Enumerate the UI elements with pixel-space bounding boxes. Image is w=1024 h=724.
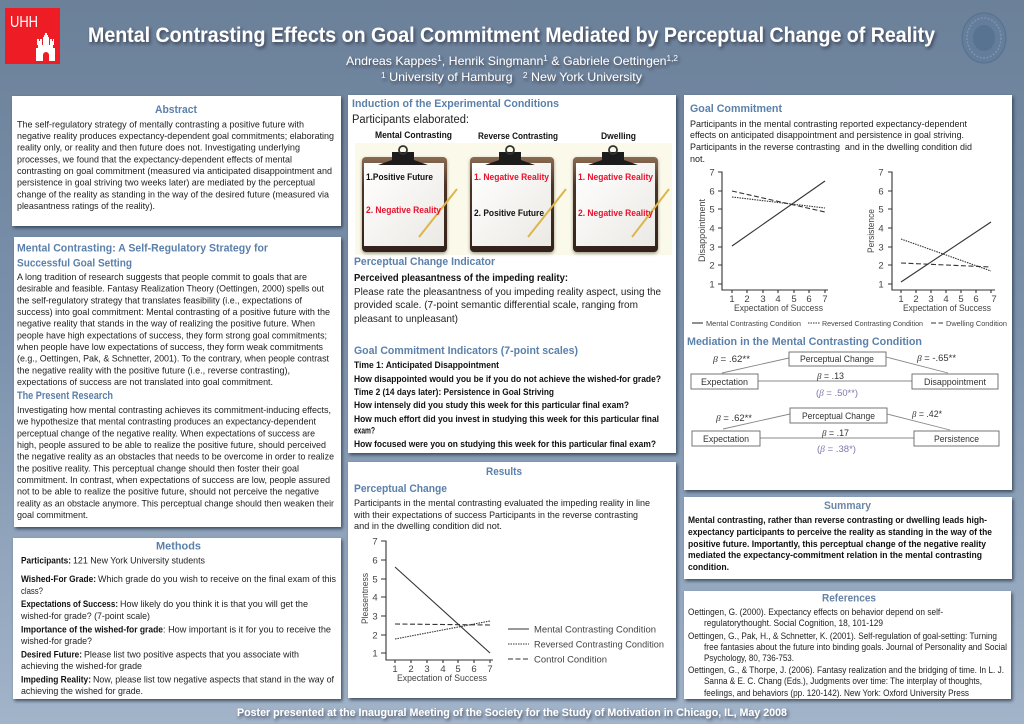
line chart: disappointment: 3 xyxy=(760,294,766,305)
text: results body xyxy=(353,498,650,531)
panel: induction and indicators xyxy=(348,95,676,453)
text: expectations of success: How likely do you think it is that you will get the xyxy=(120,599,308,609)
heading: mental contrasting xyxy=(17,242,269,270)
line chart: disappointment: Expectation of Success xyxy=(734,303,823,314)
line chart: pleasantness: 6 xyxy=(372,556,378,566)
chart legend: pleasantness: Reversed Contrasting Condition xyxy=(534,640,664,650)
line chart: disappointment: 1 xyxy=(729,294,735,305)
text: wished-for grade: Wished-For Grade: xyxy=(21,574,96,584)
clipboard: reverse contrasting: 1. Negative Reality xyxy=(474,172,549,182)
line chart: disappointment: Disappointment xyxy=(697,199,708,262)
line chart: disappointment: 7 xyxy=(709,168,715,178)
text: present research body: goal commitment. xyxy=(17,510,88,520)
text: results body: with their expectations of success Participants in the reverse contrasting xyxy=(353,510,638,520)
text: results body: and in the dwelling condition did not. xyxy=(354,521,502,531)
panel: abstract xyxy=(12,96,341,226)
diagram: persistence mediation: β = .42* xyxy=(911,409,943,419)
panel: summary xyxy=(684,497,1012,579)
text: perceptual change indicator: Perceived pleasantness of the impeding reality: xyxy=(354,273,568,284)
text: mental contrasting body: people have high expectations of success, they form strong goal commitments; xyxy=(17,330,327,340)
heading: summary: Summary xyxy=(824,500,872,512)
text: expectations of success: wished-for grade? (7-point scale) xyxy=(20,611,150,621)
line chart: pleasantness: 4 xyxy=(372,592,378,604)
text: perceptual change indicator xyxy=(354,273,661,325)
text: expectations of success xyxy=(20,599,308,621)
text: mental contrasting body: the negative reality with the positive future (i.e., reverse contrasting), xyxy=(17,365,290,375)
authors: , Henrik Singmann xyxy=(442,54,543,68)
diagram: persistence mediation: Expectation xyxy=(703,434,749,444)
text: goal commitment indicators: How focused were you on studying this week for this particular final exam? xyxy=(354,439,656,449)
text: mental contrasting body: desirable and feasible. Fantasy Realization Theory (Oettingen, 2000) spells out xyxy=(17,284,324,294)
text: importance of the wished-for grade xyxy=(20,625,331,646)
heading: goal commitment: Goal Commitment xyxy=(690,103,782,115)
text: mental contrasting body: the self-regulatory strategy that translates feasibility (i.e., expectations of xyxy=(17,295,302,305)
chart legend: pleasantness: Control Condition xyxy=(534,654,607,666)
line chart: persistence: 3 xyxy=(878,242,884,254)
line chart: disappointment: 3 xyxy=(709,242,715,254)
text: impeding reality xyxy=(21,675,334,696)
authors: New York University xyxy=(528,70,642,84)
text: present research body: not to be able to realize the positive future, should not perceive the negative xyxy=(17,487,319,497)
clipboard: mental contrasting: 1.Positive Future xyxy=(366,172,433,182)
clipboard: dwelling: 2. Negative Reality xyxy=(578,208,653,218)
authors: 1 xyxy=(543,54,548,63)
text: importance of the wished-for grade: : How important is it for you to receive the xyxy=(163,625,331,635)
text: abstract body xyxy=(17,119,334,211)
text: importance of the wished-for grade: wished-for grade? xyxy=(20,636,92,646)
authors: 1 xyxy=(437,54,442,63)
line chart: pleasantness: 5 xyxy=(372,574,378,586)
diagram: persistence mediation: β = .17 xyxy=(821,428,849,438)
text: goal commitment body: effects on anticipated disappointment and persistence in goal striving. xyxy=(690,130,964,140)
authors: & Gabriele Oettingen xyxy=(548,54,667,68)
diagram: disappointment mediation: Expectation xyxy=(701,377,748,387)
text: summary body: positive future. Importantly, this perceptual change of the negative reality xyxy=(688,539,987,549)
text: goal commitment indicators: How intensely did you study this week for this particular final exam? xyxy=(354,400,629,410)
line chart: disappointment: 6 xyxy=(709,186,715,198)
text: participants: Participants: xyxy=(21,556,71,566)
line chart: pleasantness: 5 xyxy=(455,664,461,675)
text: impeding reality: Impeding Reality: xyxy=(21,675,91,685)
text: abstract body: change of the reality as standing in the way of the desired future (measured via xyxy=(17,189,330,199)
title: Mental Contrasting Effects on Goal Commitment Mediated by Perceptual Change of Reality xyxy=(88,24,935,47)
panel: methods xyxy=(13,538,341,699)
text: reference list: regulatorythought. Social Cognition, 18, 101-129 xyxy=(704,618,883,628)
text: wished-for grade: class? xyxy=(21,586,43,596)
line chart: persistence: 4 xyxy=(878,224,884,234)
authors xyxy=(346,54,679,84)
line chart: pleasantness: Pleasentness xyxy=(360,573,371,624)
text: goal commitment body: Participants in the reverse contrasting and in the dwelling condition did xyxy=(690,142,972,152)
diagram: disappointment mediation: β = .62** xyxy=(712,354,751,364)
text: mental contrasting body: expectations of success are not translated into goal commitment. xyxy=(17,377,273,387)
text: importance of the wished-for grade: Importance of the wished-for grade xyxy=(21,625,163,635)
heading: mental contrasting: Mental Contrasting: A Self-Regulatory Strategy for xyxy=(17,242,269,254)
diagram: persistence mediation: Perceptual Change xyxy=(802,411,875,421)
text: summary body: Mental contrasting, rather than reverse contrasting or dwelling leads high- xyxy=(688,515,987,525)
text: mental contrasting body: (e.g., Oettingen, Pak, & Schnetter, 2001). To the contrary, when people contrast xyxy=(17,354,329,364)
condition labels xyxy=(375,130,636,141)
line chart: persistence xyxy=(866,168,997,314)
text: desired future xyxy=(21,650,299,671)
heading: perceptual change indicator: Perceptual Change Indicator xyxy=(354,256,496,268)
text: goal commitment body xyxy=(690,119,972,164)
heading: goal commitment indicators: Goal Commitment Indicators (7-point scales) xyxy=(354,345,578,357)
line chart: persistence: 4 xyxy=(943,294,949,305)
text: summary body xyxy=(688,515,992,572)
logo: University of Hamburg xyxy=(5,8,60,64)
text: abstract body: The self-regulatory strategy of mentally contrasting a positive future with xyxy=(17,119,304,129)
condition labels: Dwelling xyxy=(601,131,636,141)
text: wished-for grade: Which grade do you wish to receive on the final exam of this xyxy=(98,574,336,584)
line chart: persistence: 1 xyxy=(898,294,904,305)
line chart: pleasantness: 3 xyxy=(424,664,430,675)
text: goal commitment indicators: How much effort did you invest in studying this week for this particular final xyxy=(354,414,659,424)
authors: 1,2 xyxy=(667,54,679,63)
clipboard: dwelling: 1. Negative Reality xyxy=(578,172,653,182)
line chart: pleasantness: 2 xyxy=(408,664,414,675)
text: mental contrasting body: success) into goal commitment: Mental contrasting of a positive future with the xyxy=(17,307,330,317)
panel: mental contrasting strategy xyxy=(14,237,341,527)
text: present research body: the positive reality. This perceptual change should then foster their goal xyxy=(17,463,299,473)
text: participants: 121 New York University students xyxy=(73,556,205,566)
text: reference list: Oettingen, G. (2000). Expectancy effects on behavior depend on self- xyxy=(688,607,943,617)
text: participants elaborated: Participants elaborated: xyxy=(352,114,469,126)
logo: University of Hamburg: UHH xyxy=(10,14,38,31)
line chart: pleasantness xyxy=(360,536,493,684)
panel: results xyxy=(348,462,676,698)
text: mental contrasting body: A long tradition of research suggests that people commit to goals that are xyxy=(17,272,307,282)
chart legend: goal commitment xyxy=(692,319,1007,328)
clipboard: dwelling xyxy=(573,146,669,252)
text: mental contrasting body: negative reality that stands in the way of realizing the positive future. When xyxy=(17,319,315,329)
diagram: disappointment mediation: (β = .50**) xyxy=(816,388,858,398)
diagram: disappointment mediation: Disappointment xyxy=(924,377,987,387)
line chart: disappointment: 2 xyxy=(744,294,750,305)
line chart: disappointment: 4 xyxy=(709,224,715,234)
heading: references: References xyxy=(822,592,876,604)
text: impeding reality: achieving the wished for grade. xyxy=(21,686,143,696)
icon: university seal xyxy=(962,13,1006,63)
text: reference list xyxy=(688,607,1007,698)
line chart: persistence: 7 xyxy=(991,294,997,305)
text: present research body xyxy=(16,405,334,520)
text: goal commitment indicators xyxy=(354,360,661,449)
panel: references xyxy=(684,591,1011,699)
text: reference list: Psychology, 80, 736-753. xyxy=(704,653,794,663)
line chart: persistence: 3 xyxy=(928,294,934,305)
text: perceptual change indicator: Please rate the pleasantness of you impeding reality aspect, using the xyxy=(354,286,661,298)
line chart: disappointment: 2 xyxy=(709,260,715,272)
line chart: persistence: 6 xyxy=(973,294,979,305)
line chart: disappointment: 5 xyxy=(791,294,797,305)
clipboard: reverse contrasting xyxy=(470,146,566,252)
text: abstract body: negative reality produces expectancy-dependent goal commitments; elaborating xyxy=(17,131,334,141)
diagram: persistence mediation: β = .62** xyxy=(715,413,753,423)
chart legend: goal commitment: Dwelling Condition xyxy=(946,319,1007,328)
text: goal commitment body: not. xyxy=(690,154,705,164)
line chart: pleasantness: 7 xyxy=(487,664,493,675)
authors: 1 xyxy=(381,71,386,80)
line chart: pleasantness: 4 xyxy=(440,664,446,675)
line chart: pleasantness: 2 xyxy=(372,630,378,642)
heading: the present research: The Present Research xyxy=(17,390,113,402)
diagram: persistence mediation: (β = .38*) xyxy=(817,444,856,454)
condition labels: Mental Contrasting xyxy=(375,130,452,140)
text: present research body: commitment. In contrast, when expectations of success are low, people assured xyxy=(17,475,330,485)
text: present research body: the negative reality as an obstacles that needs to be overcome in order to realize xyxy=(17,452,334,462)
chart legend: goal commitment: Mental Contrasting Condition xyxy=(706,319,801,328)
line chart: persistence: Persistence xyxy=(866,209,877,253)
heading: abstract: Abstract xyxy=(155,104,197,116)
text: abstract body: pleasantness ratings of the reality). xyxy=(17,201,155,211)
text: reference list: feelings, and behaviors (pp. 120-142). New York: Oxford University Press xyxy=(704,688,970,698)
line chart: pleasantness: 1 xyxy=(392,664,398,675)
line chart: disappointment xyxy=(697,168,828,314)
text: mental contrasting body: when people have low expectations of success, they form weak commitments xyxy=(16,342,323,352)
text: perceptual change indicator: pleasant to unpleasant) xyxy=(354,313,458,325)
line chart: disappointment: 4 xyxy=(775,294,781,305)
diagram: persistence mediation: Persistence xyxy=(934,434,979,444)
text: summary body: mediated the expectancy-commitment relation in the mental contrasting xyxy=(688,550,982,560)
clipboard: mental contrasting xyxy=(362,146,457,252)
clipboard: mental contrasting: 2. Negative Reality xyxy=(366,205,441,215)
text: reference list: Sanna & E. C. Chang (Eds.), Judgments over time: The interplay of thoughts, xyxy=(704,676,982,686)
text: present research body: perceptual change of the negative reality. When expectations of success are xyxy=(17,428,315,438)
text: wished-for grade xyxy=(21,574,336,596)
line chart: persistence: 2 xyxy=(913,294,919,305)
diagram: disappointment mediation xyxy=(691,352,998,398)
text: perceptual change indicator: provided scale. (7-point semantic differential scale, ranging from xyxy=(354,299,638,311)
chart legend: goal commitment: Reversed Contrasting Condition xyxy=(822,319,923,328)
line chart: disappointment: 7 xyxy=(822,294,828,305)
footer note: Poster presented at the Inaugural Meeting of the Society for the Study of Motivation in Chicago, IL, May 2008 xyxy=(237,707,787,719)
clipboard: reverse contrasting: 2. Positive Future xyxy=(474,208,544,218)
line chart: pleasantness: Expectation of Success xyxy=(397,673,487,684)
line chart: pleasantness: 6 xyxy=(471,664,477,675)
text: desired future: achieving the wished-for grade xyxy=(21,661,142,671)
text: mental contrasting body xyxy=(16,272,330,387)
authors: University of Hamburg xyxy=(386,70,523,84)
line chart: persistence: 5 xyxy=(958,294,964,305)
text: goal commitment indicators: How disappointed would you be if you do not achieve the wished-for grade? xyxy=(354,374,661,384)
text: abstract body: contrasting on goal commitment (measured via anticipated disappointment and xyxy=(17,166,332,176)
text: present research body: high, people assured to be able to realize the positive future, should perceived xyxy=(17,440,326,450)
text: abstract body: persistence in goal striving two weeks later) are mediated by the perceptual xyxy=(17,178,315,188)
diagram: disappointment mediation: β = .13 xyxy=(816,371,844,381)
line chart: pleasantness: 1 xyxy=(372,648,378,660)
text: present research body: reality as an obstacle anymore. This perceptual change should then weaken their xyxy=(17,498,334,508)
text: summary body: condition. xyxy=(688,562,729,572)
text: impeding reality: Now, please list tow negative aspects that stand in the way of xyxy=(93,675,334,685)
heading: mediation: Mediation in the Mental Contrasting Condition xyxy=(687,336,922,348)
text: desired future: Desired Future: xyxy=(21,650,82,660)
text: goal commitment indicators: exam? xyxy=(354,426,375,436)
text: desired future: Please list two positive aspects that you associate with xyxy=(84,650,299,660)
text: summary body: expectancy participants to perceive the reality as standing in the way of the xyxy=(688,527,992,537)
line chart: persistence: 7 xyxy=(878,168,884,178)
line chart: disappointment: 1 xyxy=(709,280,715,290)
text: present research body: we hypothesize that mental contrasting produces an expectancy-dependent xyxy=(16,417,316,427)
chart legend: pleasantness xyxy=(508,624,664,666)
line chart: pleasantness: 3 xyxy=(372,612,378,622)
authors: Andreas Kappes xyxy=(346,54,435,68)
authors: 2 xyxy=(523,71,528,80)
text: goal commitment body: Participants in the mental contrasting reported expectancy-dependent xyxy=(690,119,967,129)
text: reference list: Oettingen, G., & Thorpe, J. (2006). Fantasy realization and the bridging of time. In L. J. xyxy=(688,665,1004,675)
diagram: persistence mediation xyxy=(692,408,999,454)
text: expectations of success: Expectations of Success: xyxy=(21,599,118,609)
line chart: disappointment: 5 xyxy=(709,204,715,216)
text: present research body: Investigating how mental contrasting achieves its commitment-inducing effects, xyxy=(17,405,331,415)
text: results body: Participants in the mental contrasting evaluated the impeding reality in line xyxy=(354,498,650,508)
chart legend: pleasantness: Mental Contrasting Condition xyxy=(534,624,656,636)
line chart: persistence: 5 xyxy=(878,204,884,216)
diagram: disappointment mediation: Perceptual Change xyxy=(800,354,874,364)
line chart: disappointment: 6 xyxy=(806,294,812,305)
heading: methods: Methods xyxy=(156,540,201,552)
text: abstract body: processes, we found that the expectancy-dependent effects of mental xyxy=(17,154,292,164)
text: goal commitment indicators: Time 2 (14 days later): Persistence in Goal Striving xyxy=(354,387,554,397)
line chart: persistence: Expectation of Success xyxy=(903,303,991,314)
line chart: persistence: 6 xyxy=(878,186,884,198)
line chart: pleasantness: 7 xyxy=(372,536,378,548)
text: reference list: Oettingen, G., Pak, H., & Schnetter, K. (2001). Self-regulation of goal-setting: Turning xyxy=(688,631,997,641)
heading: induction: Induction of the Experimental Conditions xyxy=(352,98,559,110)
line chart: persistence: 1 xyxy=(878,280,884,290)
heading: mental contrasting: Successful Goal Setting xyxy=(17,258,132,270)
text: goal commitment indicators: Time 1: Anticipated Disappointment xyxy=(354,360,499,370)
panel: goal commitment and mediation xyxy=(684,95,1012,490)
heading: perceptual change: Perceptual Change xyxy=(354,483,447,495)
diagram: disappointment mediation: β = -.65** xyxy=(916,353,957,363)
text: abstract body: reality only, or reality and then future does not. Investigating underlying xyxy=(17,143,300,153)
line chart: persistence: 2 xyxy=(878,260,884,272)
heading: results: Results xyxy=(486,466,522,478)
text: reference list: free fantasies about the future into binding goals. Journal of Personality and Social xyxy=(704,642,1007,652)
condition labels: Reverse Contrasting xyxy=(478,131,558,141)
